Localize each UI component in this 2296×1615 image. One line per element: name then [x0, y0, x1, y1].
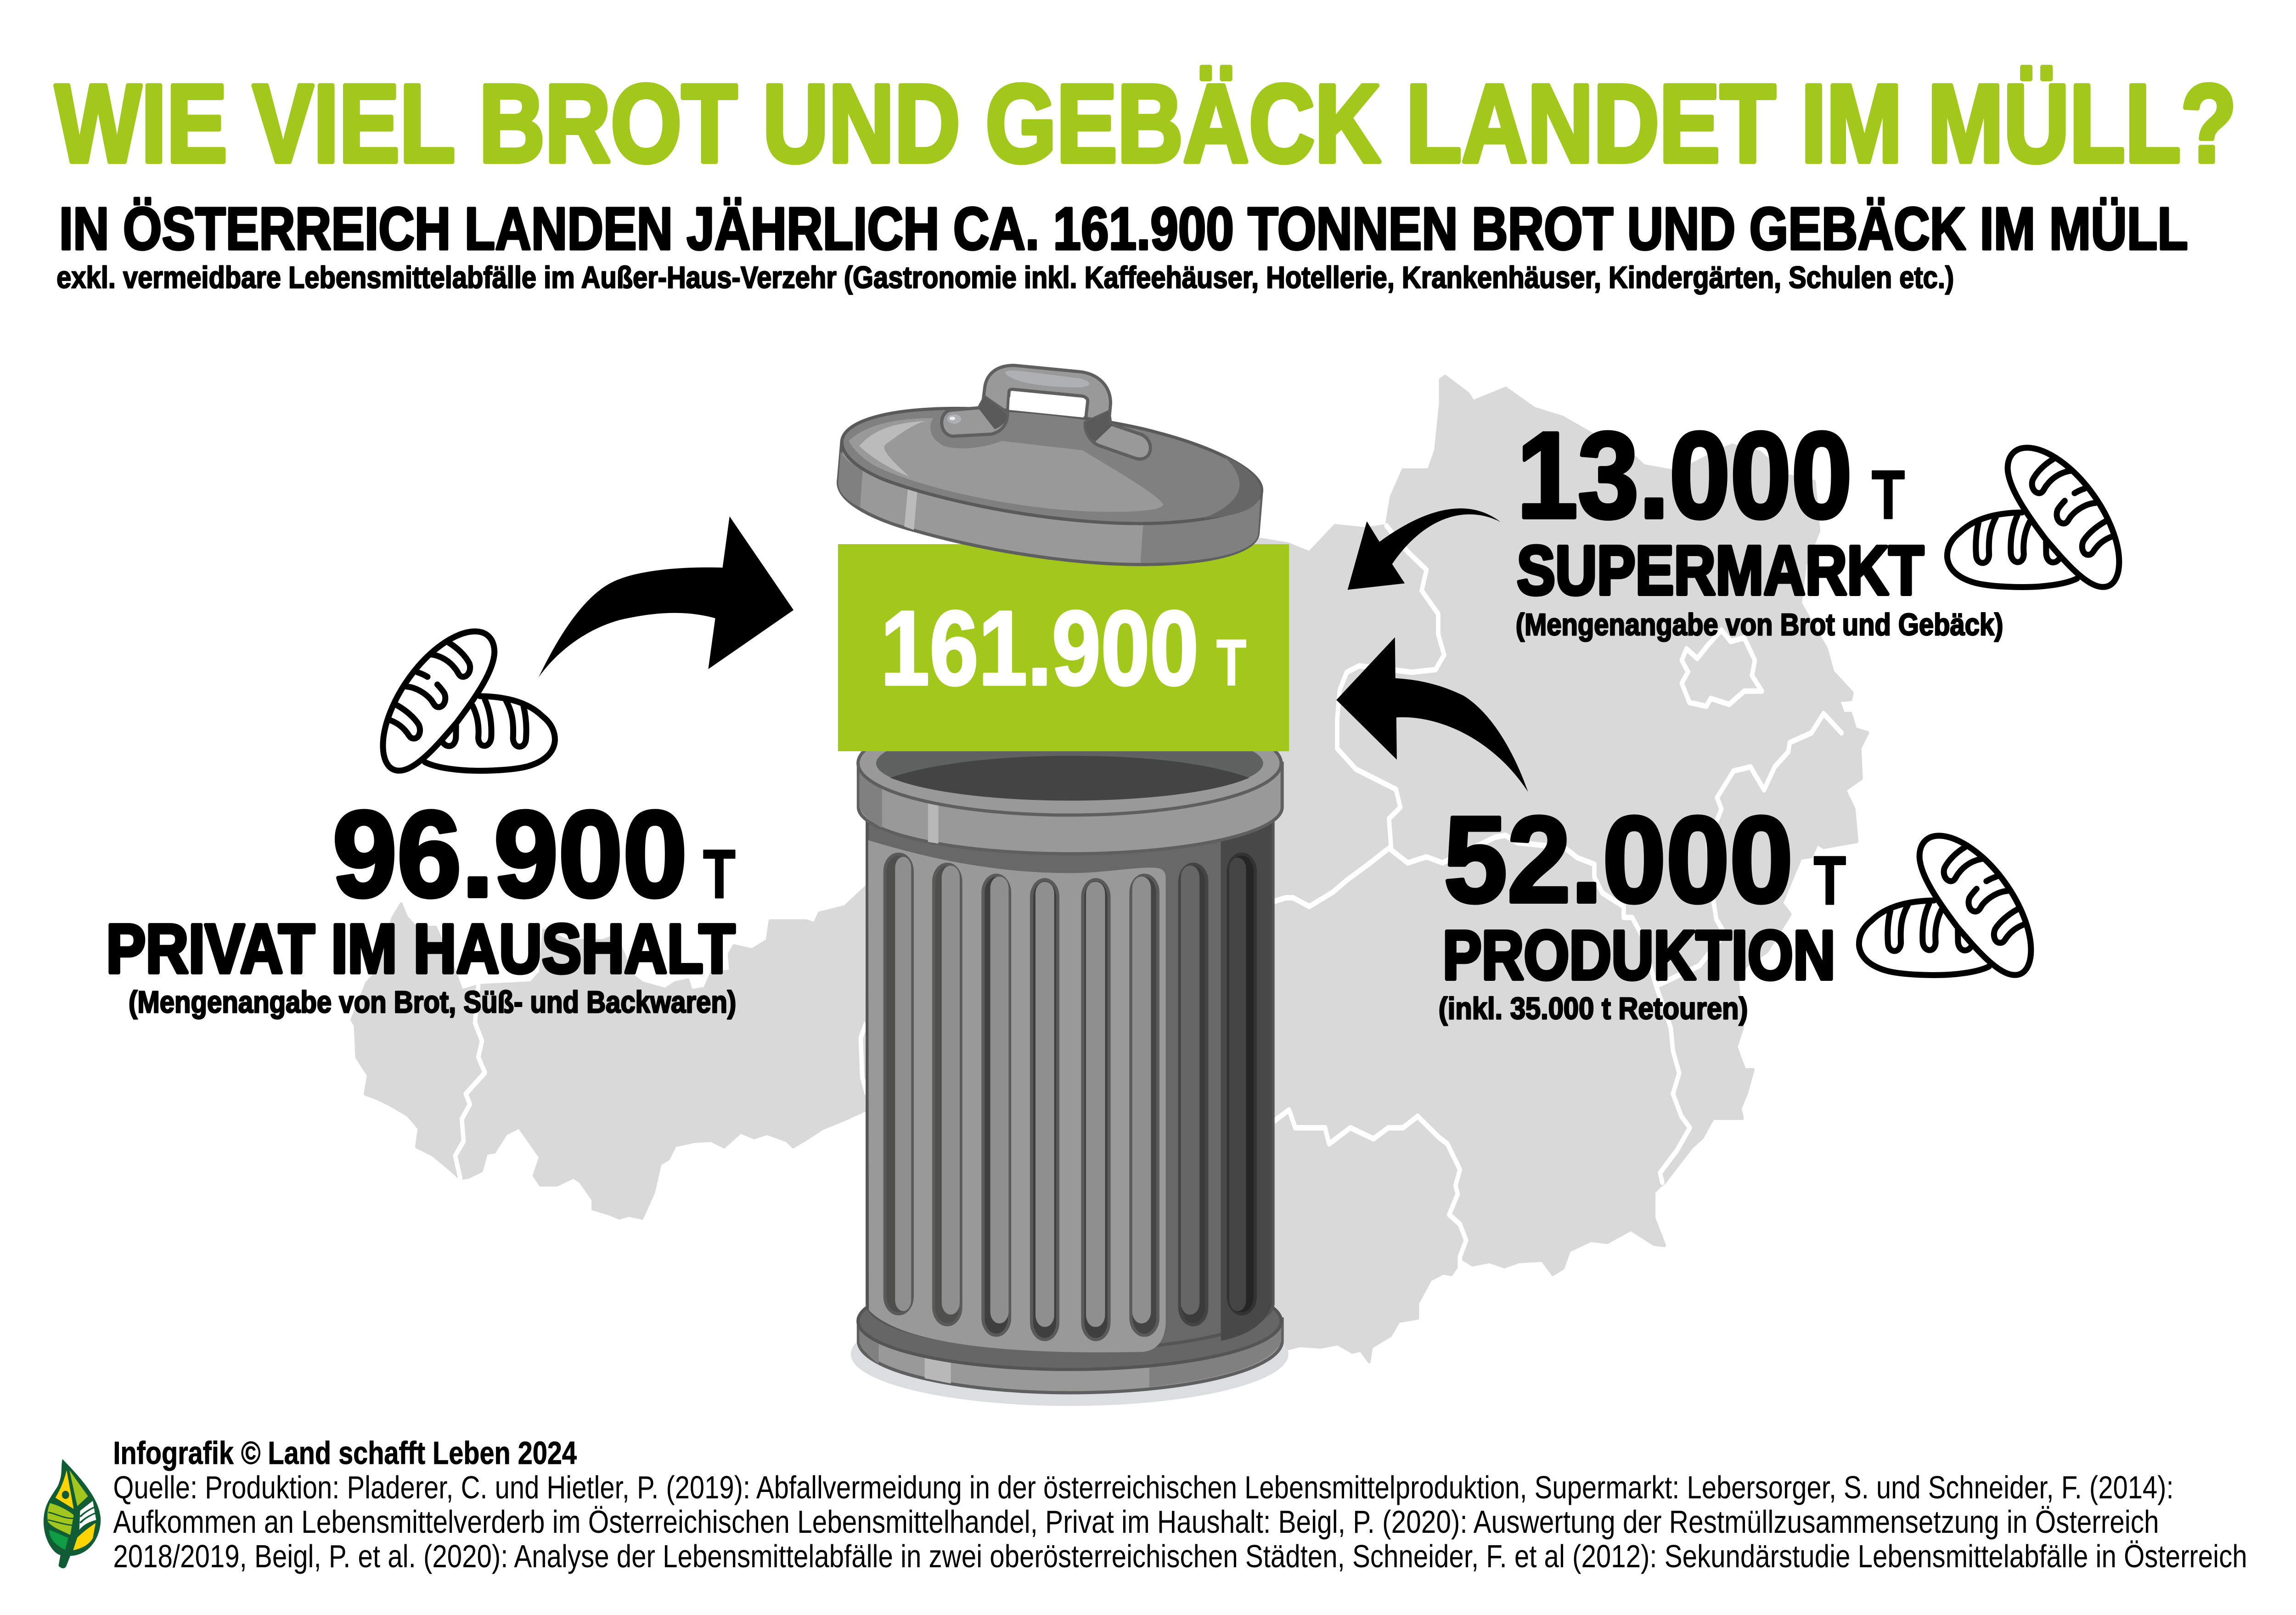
scope note: exkl. vermeidbare Lebensmittelabfälle im Außer-Haus-Verzehr (Gastronomie inkl. Kaffeehäuser, Hotellerie, Krankenhäuser, Kindergärten, Schulen etc.): [56, 260, 1954, 294]
amount: household: T: [703, 835, 736, 912]
subtitle: IN ÖSTERREICH LANDEN JÄHRLICH CA. 161.900 TONNEN BROT UND GEBÄCK IM MÜLL: [59, 196, 2188, 263]
sources: Quelle: Produktion: Pladerer, C. und Hietler, P. (2019): Abfallvermeidung in der österreichischen Lebensmittelproduktion, Supermarkt: Lebersorger, S. und Schneider, F. (2014):: [113, 1470, 2174, 1505]
note: household: (Mengenangabe von Brot, Süß- und Backwaren): [129, 985, 736, 1019]
logo: leaf: [44, 1459, 101, 1568]
note: production: (inkl. 35.000 t Retouren): [1439, 991, 1748, 1025]
arrow: household to bin: [539, 517, 793, 677]
footer credit and sources: [113, 1435, 2247, 1574]
green total panel: [838, 544, 1289, 751]
label: production: PRODUKTION: [1443, 916, 1835, 994]
icon: bread production: [1859, 836, 2031, 975]
amount: production: 52.000: [1444, 791, 1793, 928]
total unit: T: [1216, 626, 1246, 699]
amount: supermarket: T: [1872, 456, 1905, 533]
arrow: production to bin: [1336, 637, 1528, 792]
sources: [113, 1470, 2247, 1574]
trash can body: [851, 711, 1289, 1406]
label: household: PRIVAT IM HAUSHALT: [106, 910, 735, 987]
icon: bread left: [383, 631, 555, 771]
total amount: 161.900: [881, 589, 1199, 708]
sources: 2018/2019, Beigl, P. et al. (2020): Analyse der Lebensmittelabfälle in zwei oberösterreichischen Städten, Schneider, F. et al (2012): Sekundärstudie Lebensmittelabfälle in Österreich: [113, 1539, 2247, 1574]
amount: production: T: [1814, 842, 1846, 919]
title: WIE VIEL BROT UND GEBÄCK LANDET IM MÜLL?: [55, 62, 2236, 186]
trash can lid: [838, 366, 1262, 564]
credit: Infografik © Land schafft Leben 2024: [113, 1435, 577, 1471]
amount: household: 96.900: [332, 786, 687, 923]
icon: bread supermarket: [1947, 448, 2119, 587]
amount: supermarket: 13.000: [1517, 407, 1852, 544]
note: supermarket: (Mengenangabe von Brot und Gebäck): [1516, 607, 2003, 641]
background map of Austria: [352, 377, 1868, 1362]
label: supermarket: SUPERMARKT: [1517, 531, 1924, 609]
arrow: supermarket to bin: [1348, 508, 1500, 590]
sources: Aufkommen an Lebensmittelverderb im Österreichischen Lebensmittelhandel, Privat im Haushalt: Beigl, P. (2020): Auswertung der Restmüllzusammensetzung in Österreich: [113, 1504, 2159, 1540]
